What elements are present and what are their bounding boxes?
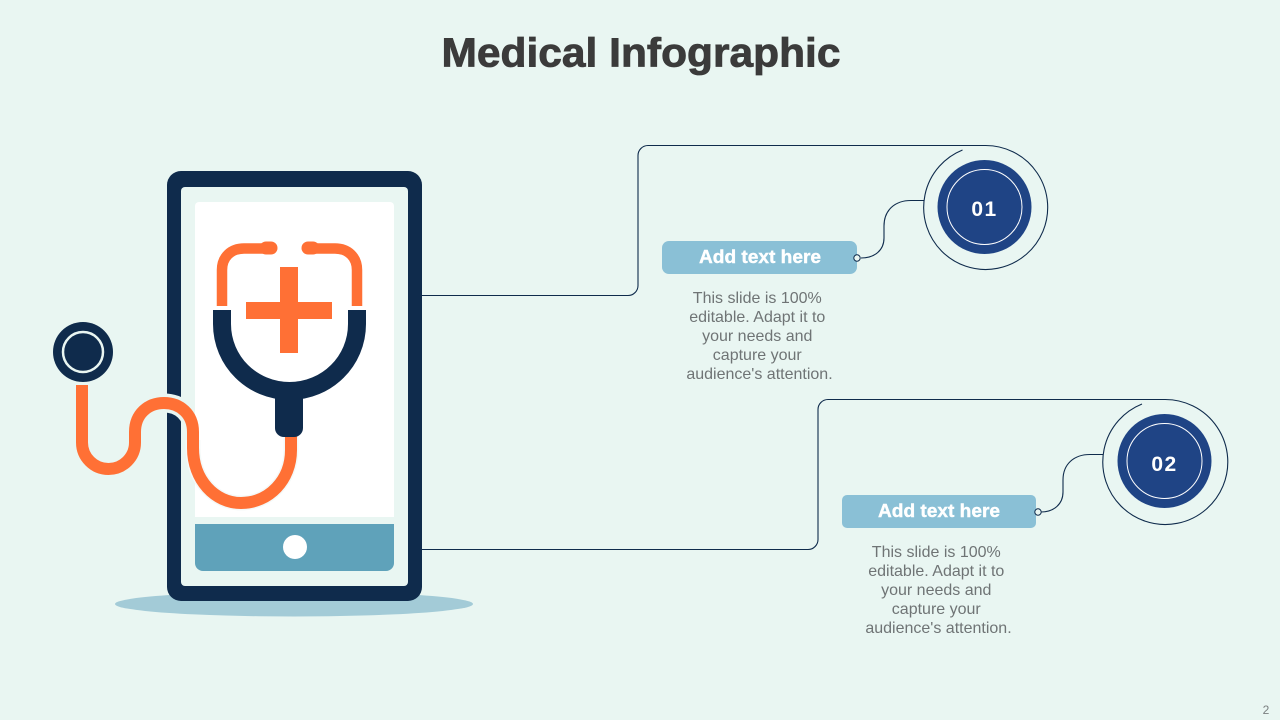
- illustration: phone with stethoscope: [53, 171, 473, 616]
- text block 01: capture your: [713, 347, 802, 364]
- panel: item 02: [422, 399, 1228, 637]
- text block 01: your needs and: [702, 328, 812, 345]
- phone shadow: [115, 592, 473, 616]
- phone home button: [283, 535, 307, 559]
- connector: badge 02 to label: [1041, 454, 1103, 512]
- title: Medical Infographic: [442, 30, 840, 76]
- stethoscope ear tubes: [222, 248, 357, 306]
- text block 02: your needs and: [881, 582, 991, 599]
- text block 01: audience's attention.: [686, 366, 833, 383]
- text block 02: editable. Adapt it to: [868, 563, 1004, 580]
- text block 02: This slide is 100%: [872, 544, 1001, 561]
- phone home bar: [195, 524, 394, 571]
- stethoscope chest piece: [53, 322, 113, 382]
- stethoscope yoke: [222, 310, 357, 437]
- label pill 02: [842, 495, 1036, 528]
- label pill 02: Add text here: [878, 500, 1000, 521]
- panel: item 01: [422, 145, 1048, 383]
- connector: phone to circle 01: [422, 145, 1048, 296]
- stethoscope tube: [82, 385, 291, 503]
- medical cross: [246, 267, 332, 353]
- label pill 01: [662, 241, 857, 274]
- connector dot 01: [854, 255, 860, 261]
- connector dot 02: [1035, 509, 1041, 515]
- label pill 01: Add text here: [699, 246, 821, 267]
- text block 02: audience's attention.: [865, 620, 1012, 637]
- badge 02: 02: [1151, 453, 1178, 476]
- connector: phone to circle 02: [422, 399, 1228, 550]
- text block 02: capture your: [892, 601, 981, 618]
- badge 01: 01: [971, 198, 998, 221]
- text block 01: This slide is 100%: [693, 290, 822, 307]
- connector: badge 01 to label: [861, 200, 924, 258]
- badge 01: [938, 160, 1032, 254]
- badge 02: [1118, 414, 1212, 508]
- phone body: [167, 171, 422, 601]
- text block 01: editable. Adapt it to: [689, 309, 825, 326]
- page number: 2: [1263, 703, 1270, 717]
- phone screen: [195, 202, 394, 517]
